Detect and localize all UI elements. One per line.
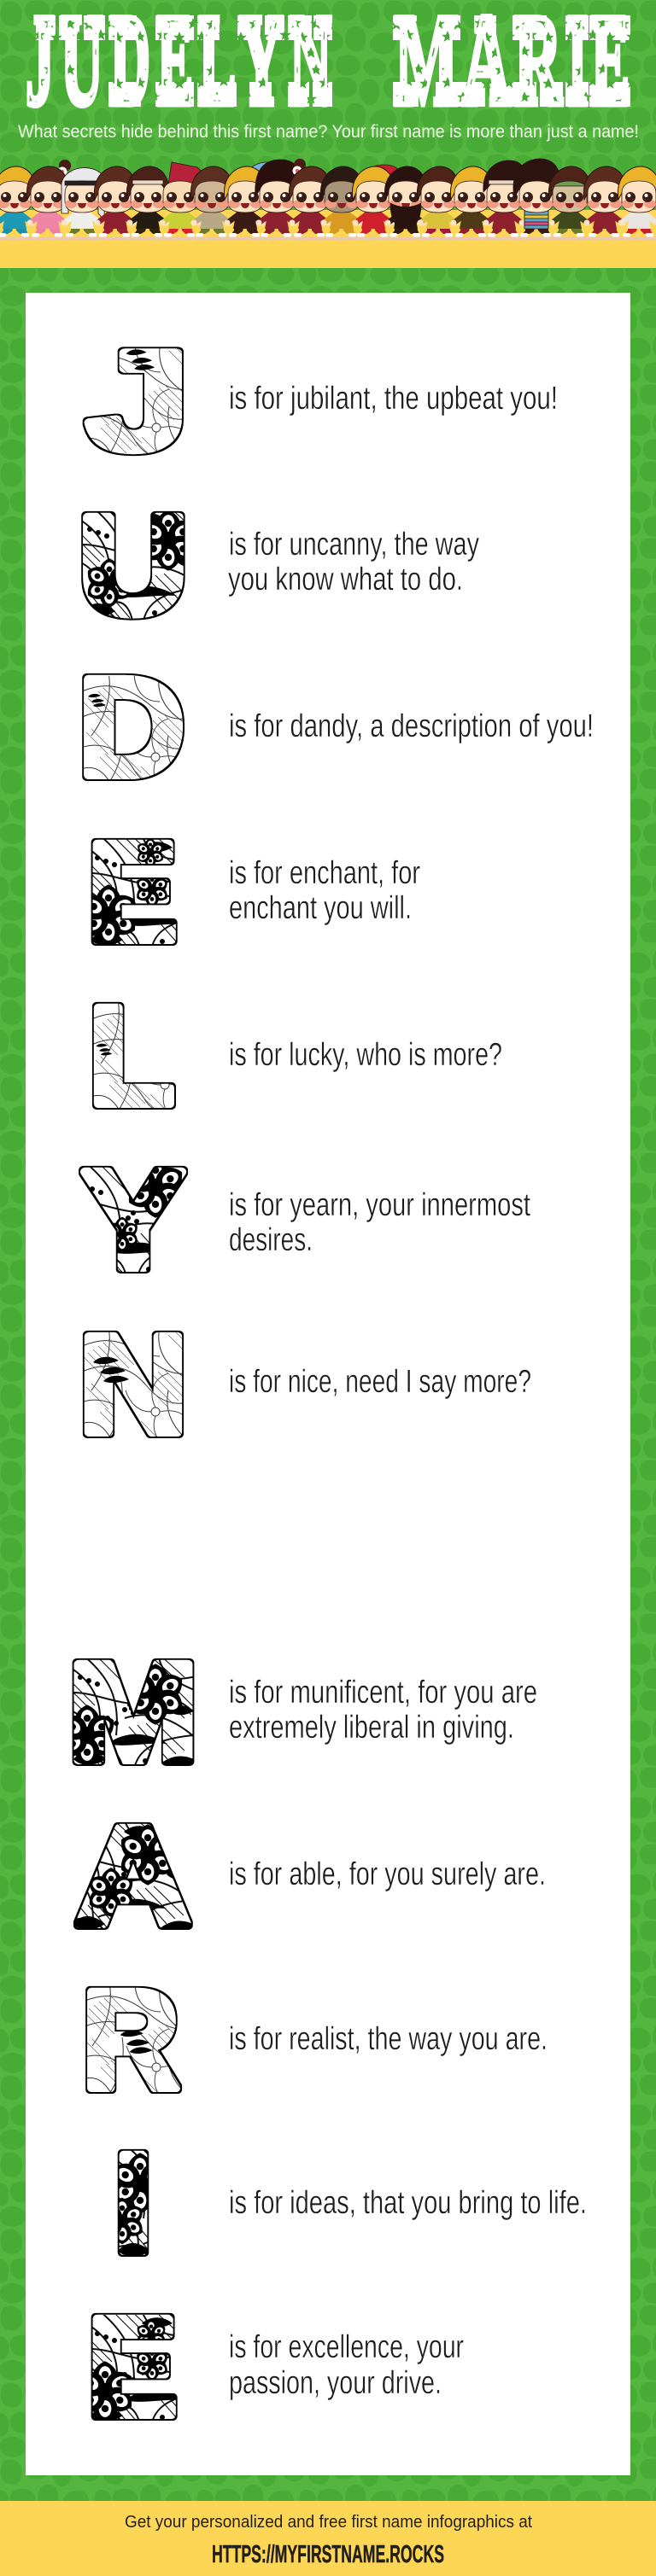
row L — [89, 977, 502, 1134]
meaning J: is for jubilant, the upbeat you! — [229, 381, 558, 417]
slab blocks of the last name — [393, 15, 630, 107]
row E — [88, 813, 420, 970]
row N — [79, 1306, 531, 1462]
letter R: R — [82, 1961, 179, 2118]
meaning E: enchant you will. — [229, 890, 412, 926]
meaning U: is for uncanny, the way — [229, 527, 479, 562]
title — [26, 0, 630, 133]
row M — [68, 1634, 537, 1790]
meaning Y — [229, 1187, 530, 1258]
letter E: E — [88, 2288, 177, 2445]
meaning M: is for munificent, for you are — [229, 1675, 537, 1711]
letter J: J — [87, 323, 189, 478]
row R — [82, 1961, 548, 2118]
meaning A: is for able, for you surely are. — [229, 1856, 546, 1892]
meaning Y: desires. — [229, 1222, 313, 1258]
meaning E: is for enchant, for — [229, 855, 420, 891]
meaning E — [229, 2329, 464, 2401]
meaning M: extremely liberal in giving. — [229, 1710, 514, 1746]
title word: first name — [26, 0, 332, 133]
meaning E: passion, your drive. — [229, 2365, 442, 2401]
slab blocks of the first name — [36, 15, 332, 107]
letter E: E — [88, 813, 177, 970]
row U — [79, 487, 479, 643]
letter D: D — [79, 649, 184, 805]
meaning U: you know what to do. — [228, 562, 463, 597]
letter Y: Y — [82, 1141, 184, 1297]
illustration: row of children in world costumes — [0, 159, 656, 237]
row I — [114, 2124, 587, 2281]
panel: letter list — [26, 293, 630, 2475]
meaning U — [228, 527, 479, 597]
row D — [79, 649, 594, 805]
footer background — [0, 2501, 656, 2576]
footer call to action: Get your personalized and free first name infographics at — [125, 2512, 532, 2532]
meaning E: is for excellence, your — [229, 2329, 464, 2365]
row Y — [82, 1141, 530, 1297]
row J — [87, 323, 558, 478]
letter N: N — [79, 1306, 188, 1462]
meaning R: is for realist, the way you are. — [229, 2021, 548, 2057]
letter L: L — [89, 977, 174, 1134]
footer — [0, 2501, 656, 2576]
meaning Y: is for yearn, your innermost — [229, 1187, 530, 1223]
letter M: M — [68, 1634, 198, 1790]
ground line under characters — [0, 236, 656, 240]
letter I: I — [114, 2124, 152, 2281]
letter A: A — [76, 1798, 190, 1954]
footer url: HTTPS://MYFIRSTNAME.ROCKS — [212, 2541, 444, 2568]
meaning M — [229, 1675, 537, 1746]
letter U: U — [79, 487, 188, 643]
meaning E — [229, 855, 420, 926]
panel background — [26, 293, 630, 2475]
meaning N: is for nice, need I say more? — [229, 1364, 531, 1400]
row A — [76, 1798, 546, 1954]
yellow band — [0, 210, 656, 268]
meaning L: is for lucky, who is more? — [229, 1037, 502, 1073]
title word: last name — [393, 0, 630, 133]
row E (second name) — [88, 2288, 464, 2445]
